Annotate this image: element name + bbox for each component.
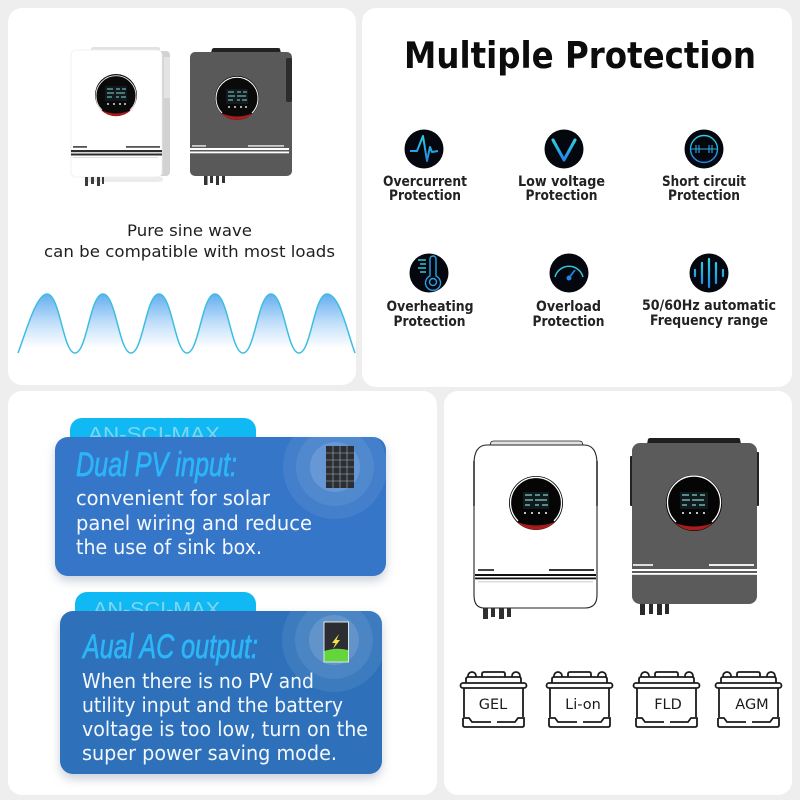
- battery: GEL: [460, 672, 526, 727]
- product photo: white and grey inverters: [71, 47, 292, 186]
- chart: sine wave: [18, 294, 355, 353]
- item: overcurrent: Protection: [389, 188, 461, 204]
- item: overload: [532, 254, 604, 330]
- battery: Li-on: [546, 672, 612, 727]
- large grey inverter: [630, 438, 759, 615]
- card: dual PV input: [55, 415, 387, 576]
- caption: pure sine wave: Pure sine wave: [127, 221, 252, 240]
- item: low voltage: [518, 130, 605, 204]
- glow: [282, 611, 382, 692]
- item: overcurrent: [383, 130, 467, 204]
- card text: convenient for solar: [76, 486, 271, 510]
- card text: [82, 669, 368, 765]
- item: overcurrent: Overcurrent: [383, 174, 467, 190]
- card text: voltage is too low, turn on the: [82, 717, 368, 741]
- battery: GEL: GEL: [479, 697, 507, 713]
- icon: V: [544, 130, 584, 168]
- large white inverter: [474, 441, 597, 619]
- panel: inverters and battery types: [444, 391, 792, 795]
- item: short circuit: Protection: [668, 188, 740, 204]
- battery: AGM: [716, 672, 782, 727]
- item: overheating: Overheating: [386, 299, 474, 315]
- item: short circuit: [662, 130, 746, 204]
- item: low voltage: Low voltage: [518, 174, 605, 190]
- card text: panel wiring and reduce: [76, 511, 312, 535]
- panel: pure sine wave: [8, 8, 356, 385]
- icon: frequency bars: [690, 254, 728, 292]
- card text: When there is no PV and: [82, 669, 314, 693]
- glow: [283, 437, 386, 519]
- icon: solar panel: [326, 446, 354, 488]
- caption: pure sine wave: can be compatible with most loads: [44, 242, 335, 261]
- panel: input and output cards: [8, 391, 437, 795]
- item: short circuit: Short circuit: [662, 174, 746, 190]
- item: low voltage: Protection: [526, 188, 598, 204]
- icon: thermometer: [410, 254, 448, 292]
- card text: super power saving mode.: [82, 741, 337, 765]
- item: frequency range: Frequency range: [650, 313, 768, 329]
- item: frequency range: 50/60Hz automatic: [642, 298, 776, 314]
- card title: Aual AC output:: [82, 628, 258, 666]
- item: overheating: [386, 254, 474, 330]
- tab: card two label: [75, 592, 256, 611]
- tab: card one label: AN-SCI-MAX: [88, 423, 220, 446]
- item: overload: Overload: [536, 299, 601, 315]
- small white inverter: [71, 47, 170, 186]
- tab: card one label: [70, 418, 256, 437]
- tab: card two label: AN-SCI-MAX: [93, 598, 220, 621]
- heading: Multiple Protection: [404, 34, 756, 77]
- card: dual AC output: [60, 588, 386, 774]
- icon: heartbeat: [404, 130, 444, 168]
- item: overheating: Protection: [394, 314, 466, 330]
- card text: utility input and the battery: [82, 693, 343, 717]
- card title: Dual PV input:: [76, 446, 237, 484]
- icon: gauge: [550, 254, 588, 292]
- item: frequency range: [642, 254, 776, 329]
- battery: FLD: FLD: [654, 697, 682, 713]
- icon: battery charge: [324, 622, 348, 662]
- card text: [76, 486, 312, 559]
- caption: pure sine wave: [44, 221, 335, 261]
- battery: Li-on: Li-on: [565, 697, 601, 713]
- battery: FLD: [634, 672, 700, 727]
- icon: short circuit: [684, 130, 724, 168]
- panel: multiple protection: [362, 8, 792, 387]
- battery: AGM: AGM: [735, 697, 769, 713]
- small grey inverter: [190, 48, 292, 185]
- card text: the use of sink box.: [76, 535, 262, 559]
- item: overload: Protection: [532, 314, 604, 330]
